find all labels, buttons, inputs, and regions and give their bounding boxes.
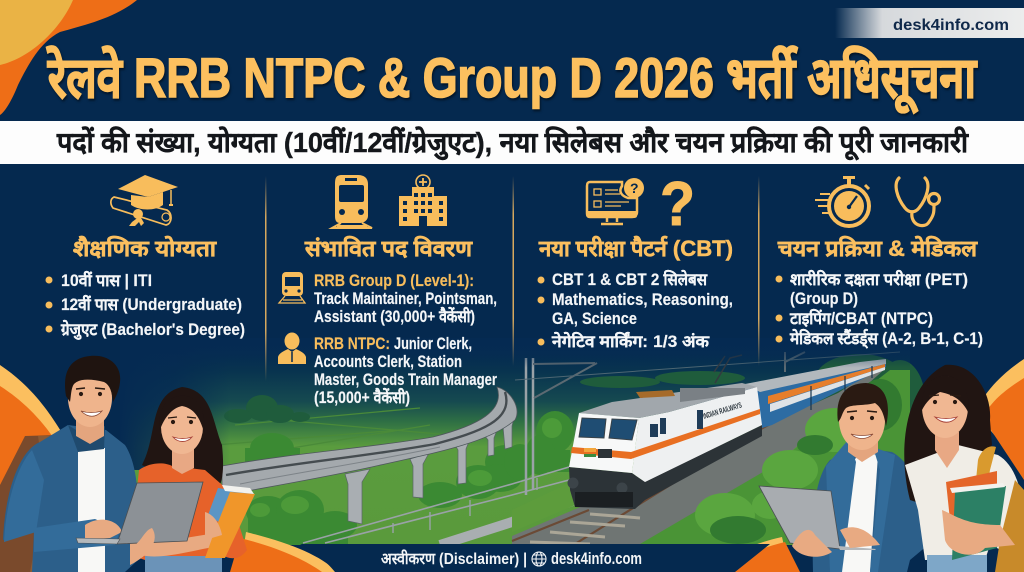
column dividers <box>265 176 760 381</box>
viaduct <box>222 387 517 524</box>
icon: person <box>278 332 306 364</box>
panel: educational qualification <box>46 175 245 340</box>
student: right woman <box>904 365 1024 572</box>
bullet list: Mathematics, Reasoning, <box>552 291 733 309</box>
icon: hospital <box>399 175 447 226</box>
heading: नया परीक्षा पैटर्न (CBT) <box>538 235 733 261</box>
text: NTPC: Junior Clerk, <box>394 335 472 353</box>
student: right man <box>813 383 928 572</box>
bullet list: CBT 1 & CBT 2 सिलेबस <box>552 269 708 289</box>
bullet list: (Group D) <box>790 290 858 308</box>
books <box>946 471 1006 560</box>
icon: computer test <box>587 178 644 224</box>
site badge <box>835 8 1024 38</box>
footer disclaimer: अस्वीकरण (Disclaimer) | <box>381 549 527 568</box>
left orange corner <box>0 365 62 510</box>
right orange corner <box>975 359 1024 480</box>
icon: small train <box>279 272 305 303</box>
subtitle strip <box>0 121 1024 164</box>
icon: question mark: ? <box>660 170 695 239</box>
panel: selection and medical <box>776 176 983 349</box>
bullet list: शारीरिक दक्षता परीक्षा (PET) <box>790 269 968 289</box>
site badge: desk4info.com <box>893 17 1009 34</box>
icon: computer test: ? <box>630 180 639 196</box>
far trees <box>224 354 925 440</box>
icon: stethoscope <box>896 178 940 226</box>
bullet list <box>538 269 733 351</box>
bullet list <box>776 269 983 349</box>
icon: train <box>332 175 372 228</box>
footer band <box>300 544 770 572</box>
laptop: left <box>76 482 203 565</box>
bullet list <box>46 270 245 340</box>
bullet list: टाइपिंग/CBAT (NTPC) <box>789 308 933 328</box>
icon: graduation cap and diploma <box>111 175 178 226</box>
train carriages <box>745 359 886 428</box>
heading: संभावित पद विवरण <box>304 235 473 261</box>
bushes under viaduct <box>245 411 574 545</box>
heading: चयन प्रक्रिया & मेडिकल <box>777 235 978 261</box>
text: NTPC: Accounts Clerk, Station <box>314 353 462 371</box>
icon: globe <box>532 552 546 566</box>
icon: stopwatch <box>815 176 869 226</box>
text: NTPC: Master, Goods Train Manager <box>314 371 497 389</box>
footer disclaimer <box>381 549 642 568</box>
panel: expected posts <box>278 175 497 407</box>
student: left man <box>0 356 139 572</box>
subtitle strip: पदों की संख्या, योग्यता (10वीं/12वीं/ग्रेजुएट), नया सिलेबस और चयन प्रक्रिया की पूरी जानकारी <box>56 126 970 161</box>
bullet list: GA, Science <box>552 310 637 328</box>
bottom orange swooshes <box>230 532 800 572</box>
text: NTPC: RRB NTPC: <box>314 334 390 353</box>
loco lettering: INDIAN RAILWAYS <box>702 401 743 421</box>
laptop: right <box>759 486 880 557</box>
bullet list: नेगेटिव मार्किंग: 1/3 अंक <box>551 331 710 351</box>
text: group D: Assistant (30,000+ वैकेंसी) <box>314 306 475 326</box>
bullet list: 12वीं पास (Undergraduate) <box>61 294 242 314</box>
bullet list: ग्रेजुएट (Bachelor's Degree) <box>60 319 245 340</box>
heading: शैक्षणिक योग्यता <box>73 235 217 261</box>
bright bushes beside track <box>640 370 910 544</box>
landscape scene <box>120 340 925 545</box>
bullet list: 10वीं पास | ITI <box>61 270 152 290</box>
text: group D: RRB Group D (Level-1): <box>314 271 474 290</box>
bullet list: मेडिकल स्टैंडर्ड्स (A-2, B-1, C-1) <box>789 328 983 349</box>
locomotive <box>568 355 762 509</box>
railway track <box>512 366 886 544</box>
header swoosh <box>0 0 137 115</box>
fade top of landscape <box>120 338 910 368</box>
text: group D <box>314 271 497 326</box>
text: NTPC <box>314 334 497 407</box>
catenary and fence <box>303 352 900 545</box>
text: group D: Track Maintainer, Pointsman, <box>314 290 497 308</box>
text: NTPC: (15,000+ वैकेंसी) <box>314 387 410 407</box>
student: left woman <box>130 387 255 572</box>
books <box>205 485 255 558</box>
panel: exam pattern <box>538 170 733 351</box>
footer disclaimer: desk4info.com <box>551 549 642 568</box>
